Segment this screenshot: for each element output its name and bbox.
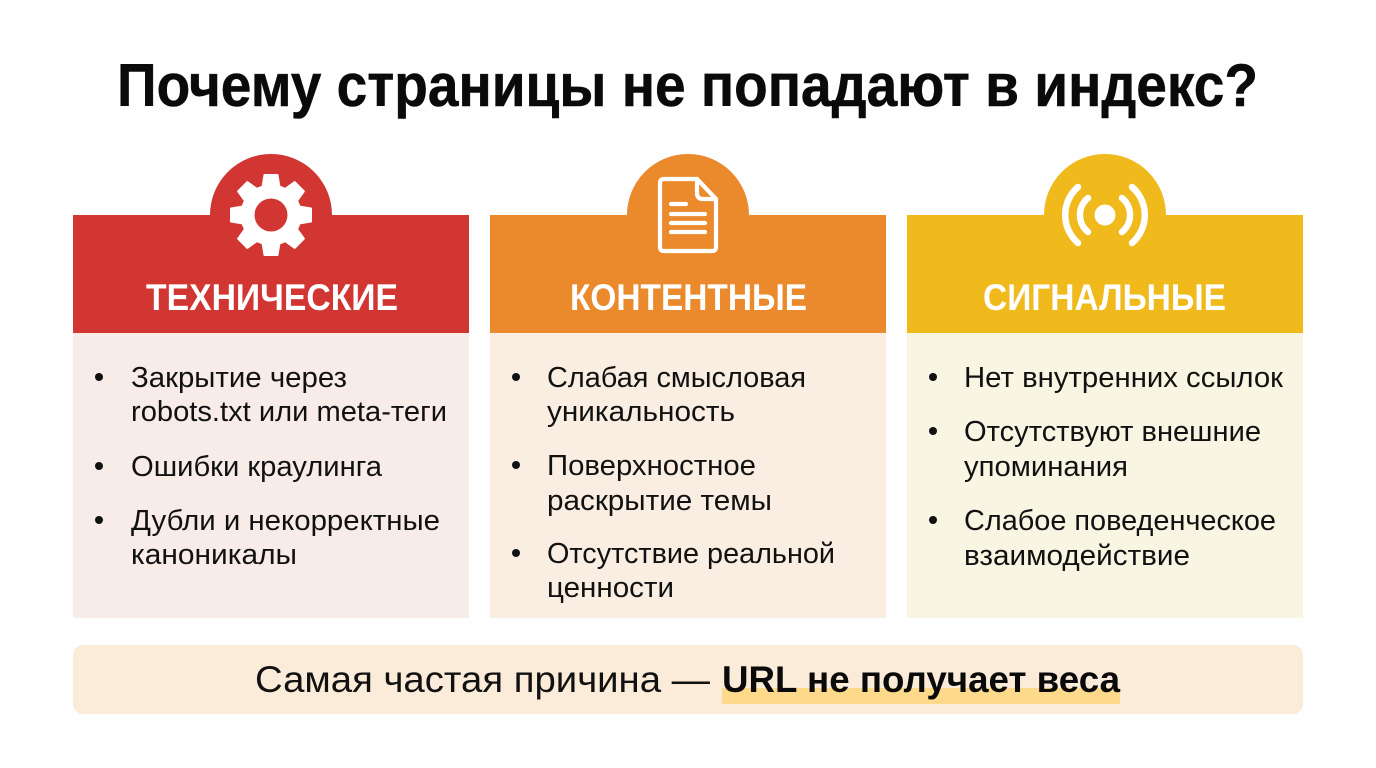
list: технические причины: каноникалы (131, 539, 297, 571)
list: технические причины: Ошибки краулинга (131, 451, 383, 483)
list: технические причины: Дубли и некорректные (131, 505, 440, 537)
heading: контентные: КОНТЕНТНЫЕ (570, 277, 807, 318)
list: технические причины (95, 362, 447, 571)
panel: сигнальные (907, 154, 1303, 618)
list: контентные причины (512, 362, 835, 604)
list: контентные причины: Отсутствие реальной (547, 538, 835, 570)
list: сигнальные причины: взаимодействие (964, 540, 1190, 572)
heading: технические: ТЕХНИЧЕСКИЕ (146, 277, 398, 318)
icon: gear (231, 175, 311, 255)
callout emphasis: URL не получает веса (722, 659, 1120, 700)
highlight marker (722, 688, 1120, 704)
list: контентные причины: Поверхностное (547, 450, 756, 482)
title: Почему страницы не попадают в индекс? (117, 52, 1258, 119)
heading: сигнальные: СИГНАЛЬНЫЕ (983, 277, 1226, 318)
header: red band with dome (73, 154, 469, 333)
list: сигнальные причины: Слабое поведенческое (964, 505, 1276, 537)
panel: контентные (490, 154, 886, 618)
callout text: Самая частая причина — (255, 659, 710, 700)
card body (73, 333, 469, 618)
list: сигнальные причины: упоминания (964, 451, 1128, 483)
callout: вывод (73, 645, 1303, 714)
list: контентные причины: ценности (547, 572, 674, 604)
list: сигнальные причины: Нет внутренних ссылок (964, 362, 1283, 394)
list: технические причины: robots.txt или meta-теги (131, 396, 447, 428)
icon: signal (1065, 187, 1145, 243)
list: контентные причины: раскрытие темы (547, 485, 772, 517)
list: контентные причины: уникальность (547, 396, 735, 428)
header: yellow band with dome (907, 154, 1303, 333)
list: сигнальные причины (929, 362, 1283, 572)
card body (907, 333, 1303, 618)
panel: технические (73, 154, 469, 618)
header: orange band with dome (490, 154, 886, 333)
list: технические причины: Закрытие через (131, 362, 347, 394)
list: контентные причины: Слабая смысловая (547, 362, 806, 394)
icon: document (660, 179, 716, 251)
card body (490, 333, 886, 618)
list: сигнальные причины: Отсутствуют внешние (964, 416, 1261, 448)
